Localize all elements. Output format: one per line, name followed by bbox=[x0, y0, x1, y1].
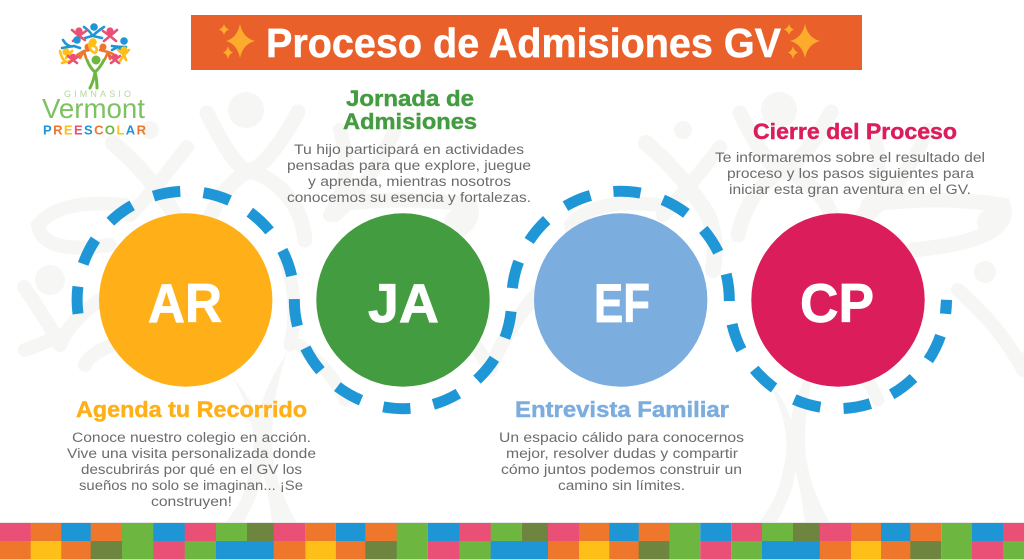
description: construyen! bbox=[151, 494, 232, 510]
description: camino sin límites. bbox=[558, 478, 685, 494]
heading: Cierre del Proceso bbox=[753, 119, 957, 144]
logo tree of colored people bbox=[60, 24, 129, 88]
title text: Proceso de Admisiones GV bbox=[266, 20, 782, 66]
heading: Admisiones bbox=[343, 109, 477, 134]
description: cómo juntos podemos construir un bbox=[501, 462, 742, 478]
description: mejor, resolver dudas y compartir bbox=[506, 446, 738, 462]
background watermark: trees of people bbox=[24, 92, 1024, 523]
step: Entrevista Familiar bbox=[499, 397, 744, 494]
step: Jornada de Admisiones bbox=[287, 86, 531, 206]
circle: CP bbox=[751, 213, 925, 387]
bottom color mosaic strip bbox=[0, 522, 1024, 559]
heading: Entrevista Familiar bbox=[515, 397, 729, 422]
description: Conoce nuestro colegio en acción. bbox=[72, 430, 311, 446]
description: sueños no solo se imaginan... ¡Se bbox=[79, 478, 303, 494]
description: y aprenda, mientras nosotros bbox=[308, 174, 511, 190]
step: Agenda tu Recorrido bbox=[67, 397, 316, 510]
description bbox=[715, 150, 985, 198]
icon: right sparkles bbox=[784, 24, 820, 59]
circle: JA bbox=[316, 213, 490, 387]
logo text: Vermont: Vermont bbox=[42, 93, 145, 124]
circle: JA: JA bbox=[368, 272, 439, 334]
description: Un espacio cálido para conocernos bbox=[499, 430, 744, 446]
circle: AR: AR bbox=[148, 272, 222, 334]
circle: EF: EF bbox=[594, 272, 650, 334]
description bbox=[67, 430, 316, 510]
step: Cierre del Proceso bbox=[715, 119, 985, 198]
description bbox=[499, 430, 744, 494]
description: pensadas para que explore, juegue bbox=[287, 158, 531, 174]
logo text: GIMNASIO: GIMNASIO bbox=[64, 89, 131, 99]
description: iniciar esta gran aventura en el GV. bbox=[729, 182, 971, 198]
description: Te informaremos sobre el resultado del bbox=[715, 150, 985, 166]
heading: Agenda tu Recorrido bbox=[76, 397, 307, 422]
description: proceso y los pasos siguientes para bbox=[727, 166, 974, 182]
icon: left sparkles bbox=[219, 24, 255, 59]
circle: CP: CP bbox=[800, 272, 874, 334]
description bbox=[287, 142, 531, 206]
heading: Jornada de bbox=[346, 86, 474, 111]
logo text: PREESCOLAR: PREESCOLAR bbox=[43, 122, 147, 138]
description: conocemos su esencia y fortalezas. bbox=[287, 190, 531, 206]
circle: AR bbox=[99, 213, 272, 387]
title banner bbox=[191, 15, 862, 70]
dashed serpentine path bbox=[77, 191, 946, 409]
description: descubrirás por qué en el GV los bbox=[81, 462, 302, 478]
circle: EF bbox=[534, 213, 707, 387]
description: Vive una visita personalizada donde bbox=[67, 446, 316, 462]
logo: Gimnasio Vermont Preescolar bbox=[42, 24, 147, 138]
description: Tu hijo participará en actividades bbox=[294, 142, 524, 158]
